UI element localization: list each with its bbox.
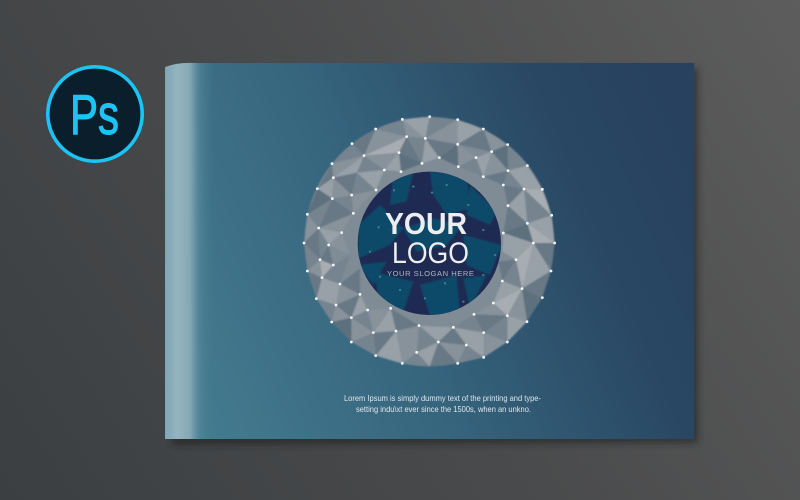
body text block: Lorem Ipsum is simply dummy text of the printing and type- (344, 393, 541, 403)
body text block (344, 393, 541, 414)
icon: Photoshop badge: Ps (70, 83, 119, 147)
icon: Photoshop badge (48, 67, 142, 161)
polygon mesh ring (304, 117, 555, 367)
logo text: LOGO: LOGO (392, 237, 469, 270)
brochure shadow (172, 68, 698, 445)
logo slogan: YOUR SLOGAN HERE (387, 269, 474, 278)
panel: brochure cover (165, 63, 694, 439)
logo text: YOUR: YOUR (385, 206, 467, 241)
central hub circle (358, 171, 502, 316)
polygon globe logo (303, 115, 556, 367)
body text block: setting indu\xt ever since the 1500s, when an unkno. (356, 404, 531, 414)
network dots (303, 115, 556, 365)
